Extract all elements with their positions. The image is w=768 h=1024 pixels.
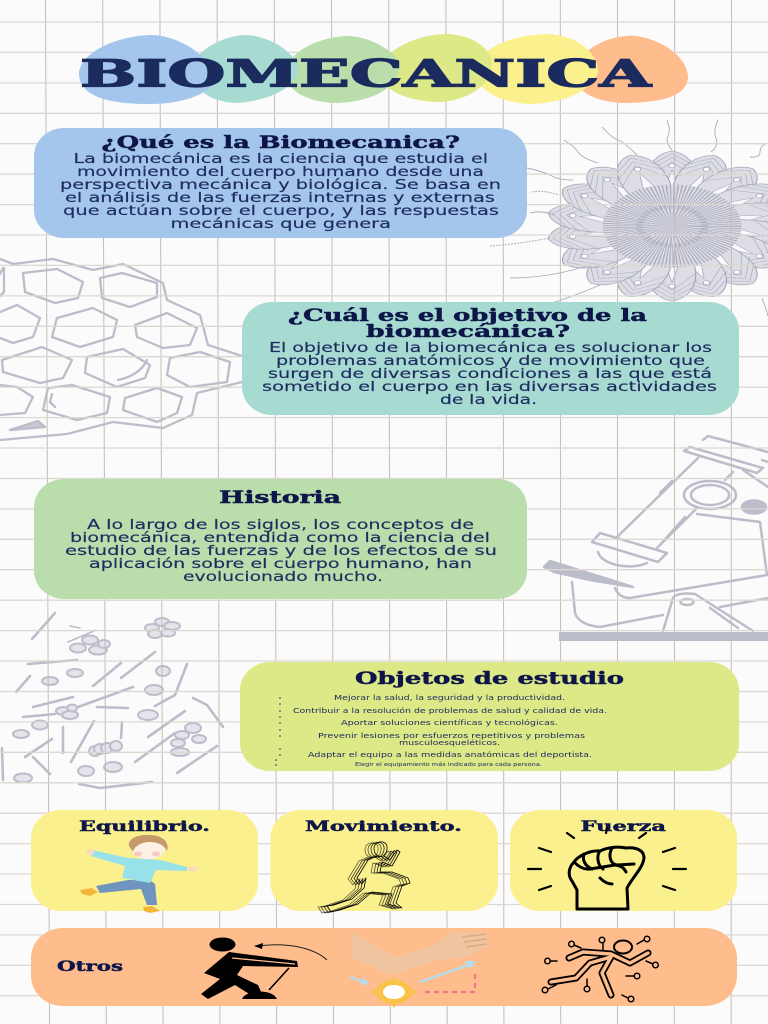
body text: mecánicas que genera bbox=[170, 216, 391, 232]
panel: objetivo de la biomecanica bbox=[242, 302, 739, 415]
body text: sometido el cuerpo en las diversas actividades bbox=[262, 379, 717, 395]
heading: ¿Cuál es el objetivo de la bbox=[288, 306, 647, 326]
heading: Equilibrio. bbox=[79, 819, 210, 835]
title text: BIOMECANICA bbox=[80, 52, 653, 96]
panel: historia bbox=[34, 479, 527, 599]
heading: Objetos de estudio bbox=[355, 669, 624, 689]
body text: aplicación sobre el cuerpo humano, han bbox=[89, 556, 472, 572]
icon: athlete on resistance machine bbox=[201, 938, 327, 999]
illustration: hexagonal cell tissue bbox=[0, 259, 242, 440]
heading bbox=[288, 306, 647, 342]
icon: balancing child bbox=[80, 835, 198, 913]
body text bbox=[262, 340, 717, 408]
heading: biomecánica? bbox=[366, 322, 570, 342]
body text bbox=[65, 517, 497, 585]
body text: estudio de las fuerzas y de los efectos de su bbox=[65, 543, 497, 559]
heading: ¿Qué es la Biomecanica? bbox=[102, 133, 460, 153]
illustration: microscope bbox=[544, 436, 768, 641]
illustration: bacteria and microbes bbox=[2, 613, 223, 788]
panel: objetos de estudio bbox=[240, 662, 739, 771]
body text: que actúan sobre el cuerpo, y las respuestas bbox=[63, 203, 499, 219]
icon: runner with circuit nodes bbox=[542, 936, 658, 1002]
panel: equilibrio bbox=[31, 810, 258, 913]
body text: problemas anatómicos y de movimiento que bbox=[276, 353, 705, 369]
list text: Prevenir lesiones por esfuerzos repetitivos y problemas bbox=[318, 731, 585, 740]
list text: Contribuir a la resolución de problemas de salud y calidad de vida. bbox=[293, 706, 607, 715]
icon: arm and joint lever diagram bbox=[350, 932, 488, 1008]
list text: Mejorar la salud, la seguridad y la productividad. bbox=[334, 693, 565, 702]
panel: otros bbox=[31, 928, 737, 1008]
title banner bbox=[79, 34, 688, 104]
body text: biomecánica, entendida como la ciencia del bbox=[70, 530, 490, 546]
icon: raised fist bbox=[528, 828, 686, 909]
body text: La biomecánica es la ciencia que estudia el bbox=[74, 151, 488, 167]
list text: Adaptar el equipo a las medidas anatómicas del deportista. bbox=[308, 750, 592, 759]
list text: Elegir el equipamiento más indicado para cada persona. bbox=[355, 761, 542, 768]
panel: movimiento bbox=[270, 810, 498, 913]
heading: Otros bbox=[57, 959, 123, 975]
body text: perspectiva mecánica y biológica. Se basa en bbox=[60, 177, 501, 193]
panel: que es la biomecanica bbox=[34, 128, 527, 238]
body text: evolucionado mucho. bbox=[183, 569, 383, 585]
heading: Movimiento. bbox=[305, 819, 462, 835]
list text: musculoesqueléticos. bbox=[399, 738, 500, 747]
body text: A lo largo de los siglos, los conceptos de bbox=[87, 517, 474, 533]
body text: El objetivo de la biomecánica es solucionar los bbox=[269, 340, 712, 356]
body text: de la vida. bbox=[440, 392, 537, 408]
body text bbox=[60, 151, 501, 232]
illustration: radial cell bbox=[490, 120, 768, 316]
body text: surgen de diversas condiciones a las que está bbox=[268, 366, 712, 382]
bullet dots bbox=[275, 697, 281, 766]
heading: Fuerza bbox=[580, 819, 666, 835]
list text bbox=[293, 693, 607, 768]
heading: Historia bbox=[219, 488, 341, 508]
panel: fuerza bbox=[510, 810, 737, 911]
body text: el análisis de las fuerzas internas y externas bbox=[65, 190, 495, 206]
body text: movimiento del cuerpo humano desde una bbox=[77, 164, 484, 180]
list text: Aportar soluciones científicas y tecnológicas. bbox=[341, 718, 558, 727]
icon: runner with motion trails bbox=[318, 842, 410, 913]
